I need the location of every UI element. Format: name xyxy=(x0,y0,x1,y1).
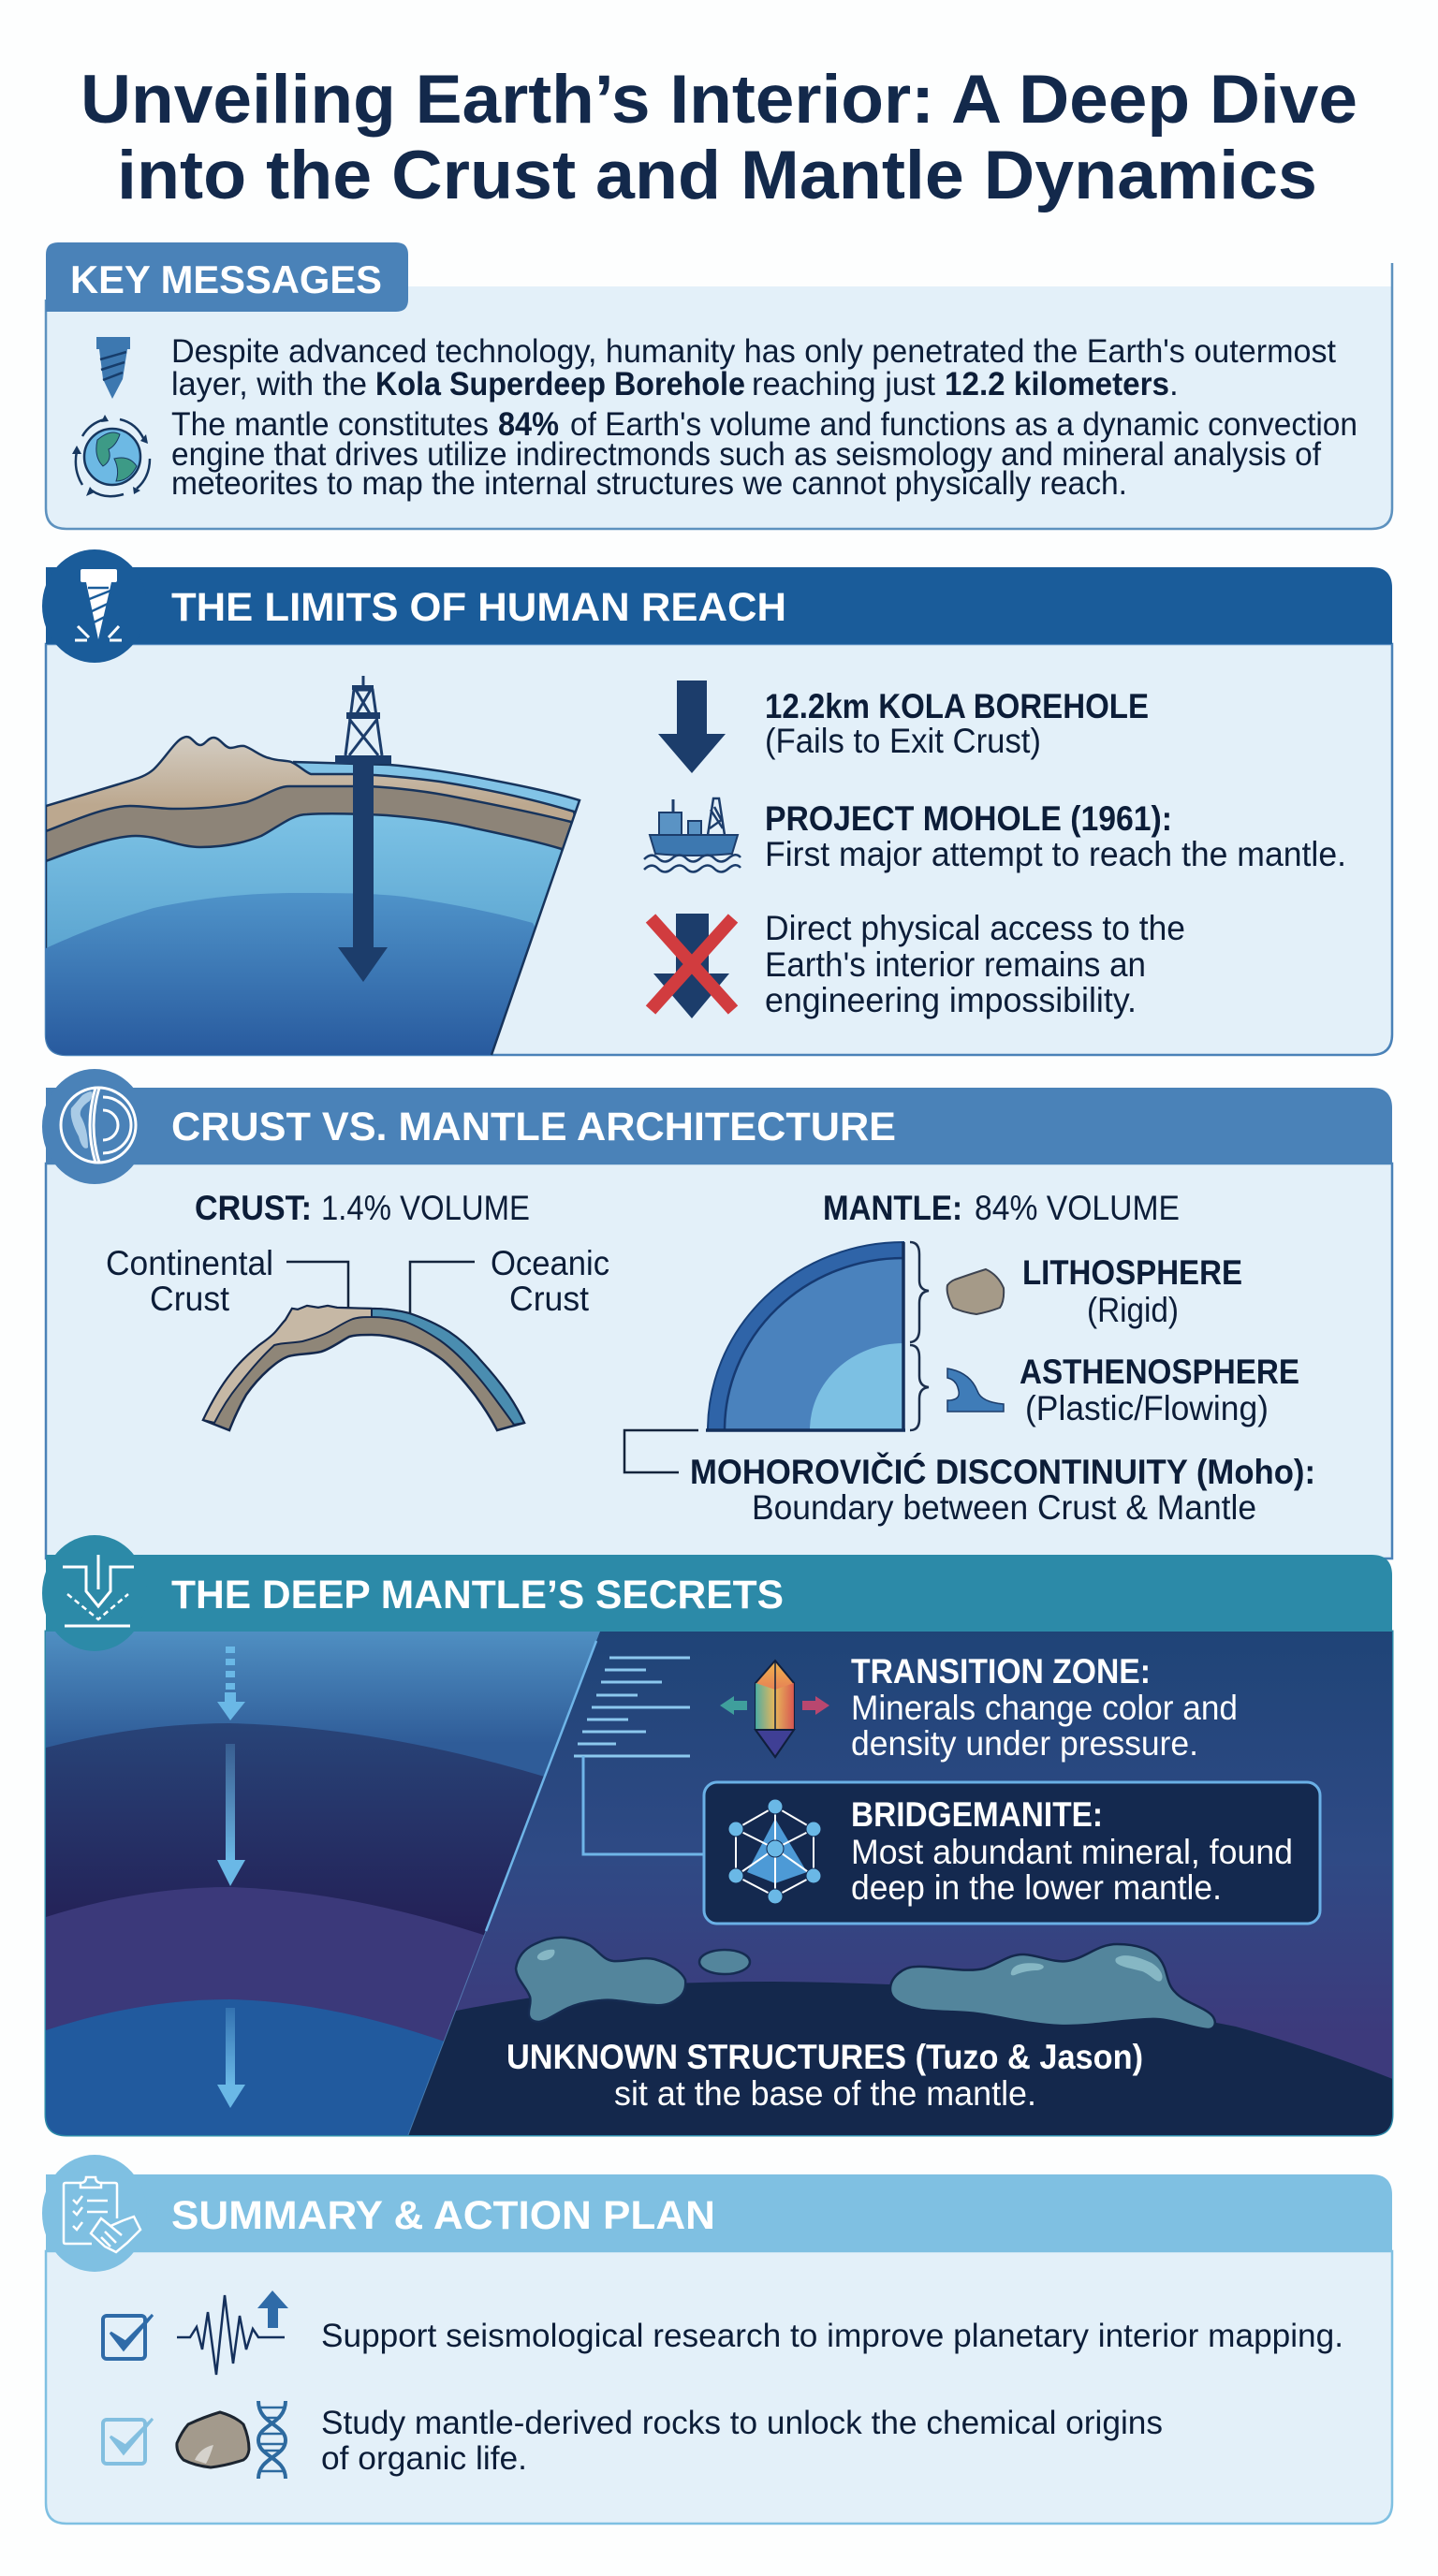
structures: Tuzo and Jason blobs xyxy=(516,1938,1215,2029)
list item: impossibility xyxy=(651,909,1185,1019)
label: lithosphere: LITHOSPHERE xyxy=(1022,1253,1242,1292)
label: asthenosphere: ASTHENOSPHERE xyxy=(1020,1353,1299,1391)
icon: DNA helix xyxy=(258,2401,286,2479)
label: asthenosphere xyxy=(1020,1353,1299,1427)
icon: crystal with arrows xyxy=(720,1661,829,1757)
title: Unveiling Earth’s Interior: A Deep Dive xyxy=(81,62,1357,138)
list item: impossibility: engineering impossibility. xyxy=(765,981,1137,1019)
text: borehole message: 12.2 kilometers xyxy=(945,366,1169,402)
callout: bridgemanite: BRIDGEMANITE: xyxy=(851,1795,1103,1834)
connector: depth scale to bridgemanite xyxy=(583,1756,704,1854)
text: mantle message: The mantle constitutes xyxy=(171,406,489,443)
label: continental crust: Crust xyxy=(150,1280,230,1318)
text: mantle message: of Earth's volume and functions as a dynamic convection xyxy=(570,406,1357,443)
action item: mantle-derived rocks: Study mantle-derived rocks to unlock the chemical origins xyxy=(321,2405,1163,2441)
list item: Project Mohole xyxy=(644,798,1346,873)
label: unknown structures xyxy=(506,2038,1143,2113)
icon: crossed out arrow xyxy=(651,914,733,1018)
diagram: mantle quarter xyxy=(706,1242,905,1430)
text: borehole message: . xyxy=(1169,366,1179,402)
label: lithosphere xyxy=(1022,1253,1242,1329)
label: continental crust xyxy=(106,1244,348,1318)
text: borehole message: layer, with the xyxy=(171,366,367,402)
icon: checkbox xyxy=(103,2315,153,2359)
arrow: borehole depth xyxy=(338,764,388,982)
icon: half globe, half layers xyxy=(61,1088,136,1163)
title xyxy=(81,62,1357,213)
callout: bridgemanite: deep in the lower mantle. xyxy=(851,1868,1222,1907)
callout: transition zone: TRANSITION ZONE: xyxy=(851,1652,1151,1690)
icon: rock xyxy=(177,2412,249,2467)
mantle base xyxy=(403,1982,1395,2139)
text: mantle message: 84% xyxy=(498,406,559,443)
action item: mantle-derived rocks: of organic life. xyxy=(321,2440,527,2477)
callout: transition zone: Minerals change color and xyxy=(851,1689,1238,1727)
diagram: crust arc xyxy=(203,1306,524,1430)
heading bar: limits: THE LIMITS OF HUMAN REACH xyxy=(171,585,786,630)
icon: flowing wave xyxy=(947,1368,1004,1412)
label: Moho discontinuity: Boundary between Crust & Mantle xyxy=(752,1488,1256,1527)
list item: Project Mohole: PROJECT MOHOLE (1961): xyxy=(765,799,1172,838)
label: Moho discontinuity xyxy=(624,1430,1315,1527)
heading bar: limits xyxy=(42,549,1392,663)
list item: impossibility: Direct physical access to the xyxy=(765,909,1185,947)
illustration: crust cross-section with borehole xyxy=(46,676,599,1055)
icon: seismic wave with up arrow xyxy=(177,2291,288,2375)
heading bar: summary: SUMMARY & ACTION PLAN xyxy=(171,2193,715,2238)
label: asthenosphere: (Plastic/Flowing) xyxy=(1025,1389,1269,1427)
list item: Project Mohole: First major attempt to reach the mantle. xyxy=(765,835,1346,873)
icon: screw xyxy=(96,337,130,399)
heading tab: key messages: KEY MESSAGES xyxy=(70,257,382,301)
label: continental crust: Continental xyxy=(106,1244,273,1282)
label: Moho discontinuity: MOHOROVIČIĆ DISCONTINUITY (Moho): xyxy=(690,1452,1315,1491)
heading: crust volume xyxy=(195,1189,530,1227)
heading: crust volume: 1.4% VOLUME xyxy=(321,1189,530,1227)
label: lithosphere: (Rigid) xyxy=(1087,1291,1179,1329)
illustration: mantle layers xyxy=(46,1632,626,2144)
icon: checkbox light xyxy=(103,2419,153,2464)
text: borehole message xyxy=(171,333,1336,402)
heading bar: crust vs mantle: CRUST VS. MANTLE ARCHITECTURE xyxy=(171,1105,896,1149)
icon: globe with convection arrows xyxy=(72,415,150,496)
right background panel xyxy=(403,1632,1395,2139)
panel: the limits of human reach xyxy=(42,549,1392,1055)
list item: impossibility: Earth's interior remains an xyxy=(765,945,1146,984)
callout: bridgemanite xyxy=(704,1782,1320,1924)
action item: mantle-derived rocks xyxy=(103,2401,1163,2479)
heading bar: crust vs mantle xyxy=(42,1069,1392,1184)
icon: drilling derrick xyxy=(335,676,391,764)
heading tab: key messages xyxy=(46,242,408,312)
action item: seismological research: Support seismological research to improve planetary interior mapping. xyxy=(321,2318,1343,2354)
panel: the deep mantle's secrets xyxy=(42,1535,1395,2144)
icon: down arrow xyxy=(658,681,726,773)
heading: mantle volume: MANTLE: xyxy=(823,1189,962,1227)
depth arrows xyxy=(217,1647,245,2108)
text: mantle message: meteorites to map the internal structures we cannot physically reach. xyxy=(171,465,1127,502)
heading: crust volume: CRUST: xyxy=(195,1189,312,1227)
icon: rock xyxy=(947,1269,1004,1314)
text: mantle message xyxy=(171,406,1357,502)
label: oceanic crust xyxy=(410,1244,609,1318)
text: borehole message: reaching just xyxy=(752,366,935,402)
callout: transition zone xyxy=(720,1652,1238,1763)
panel: key messages xyxy=(46,242,1392,529)
callout: transition zone: density under pressure. xyxy=(851,1724,1198,1763)
list item: Kola borehole: (Fails to Exit Crust) xyxy=(765,722,1041,760)
heading: mantle volume: 84% VOLUME xyxy=(975,1189,1180,1227)
label: oceanic crust: Crust xyxy=(509,1280,590,1318)
icon: mineral lattice xyxy=(728,1799,821,1904)
depth scale lines xyxy=(574,1658,690,1756)
text: borehole message: Kola Superdeep Borehole xyxy=(375,366,745,402)
panel: crust vs. mantle architecture xyxy=(42,1069,1392,1559)
text: borehole message: Despite advanced technology, humanity has only penetrated the Earth's outermost xyxy=(171,333,1336,370)
title: into the Crust and Mantle Dynamics xyxy=(117,138,1317,213)
callout: bridgemanite: Most abundant mineral, found xyxy=(851,1833,1293,1871)
action item: seismological research xyxy=(103,2291,1343,2375)
icon: descent funnel xyxy=(63,1555,134,1626)
heading bar: summary xyxy=(42,2155,1392,2272)
list item: Kola borehole: 12.2km KOLA BOREHOLE xyxy=(765,687,1149,725)
icon: drill bit xyxy=(75,569,122,640)
label: unknown structures: sit at the base of the mantle. xyxy=(614,2074,1036,2113)
icon: drilling ship xyxy=(644,798,741,872)
heading bar: deep mantle xyxy=(42,1535,1392,1651)
panel: summary and action plan xyxy=(42,2155,1392,2524)
list item: Kola borehole xyxy=(658,681,1149,773)
icon: clipboard and handshake xyxy=(64,2177,140,2252)
heading: mantle volume xyxy=(823,1189,1180,1227)
label: oceanic crust: Oceanic xyxy=(491,1244,609,1282)
text: mantle message: engine that drives utilize indirectmonds such as seismology and mineral analysis of xyxy=(171,436,1321,473)
heading bar: deep mantle: THE DEEP MANTLE’S SECRETS xyxy=(171,1573,784,1617)
label: unknown structures: UNKNOWN STRUCTURES (Tuzo & Jason) xyxy=(506,2038,1143,2076)
braces xyxy=(910,1242,929,1430)
